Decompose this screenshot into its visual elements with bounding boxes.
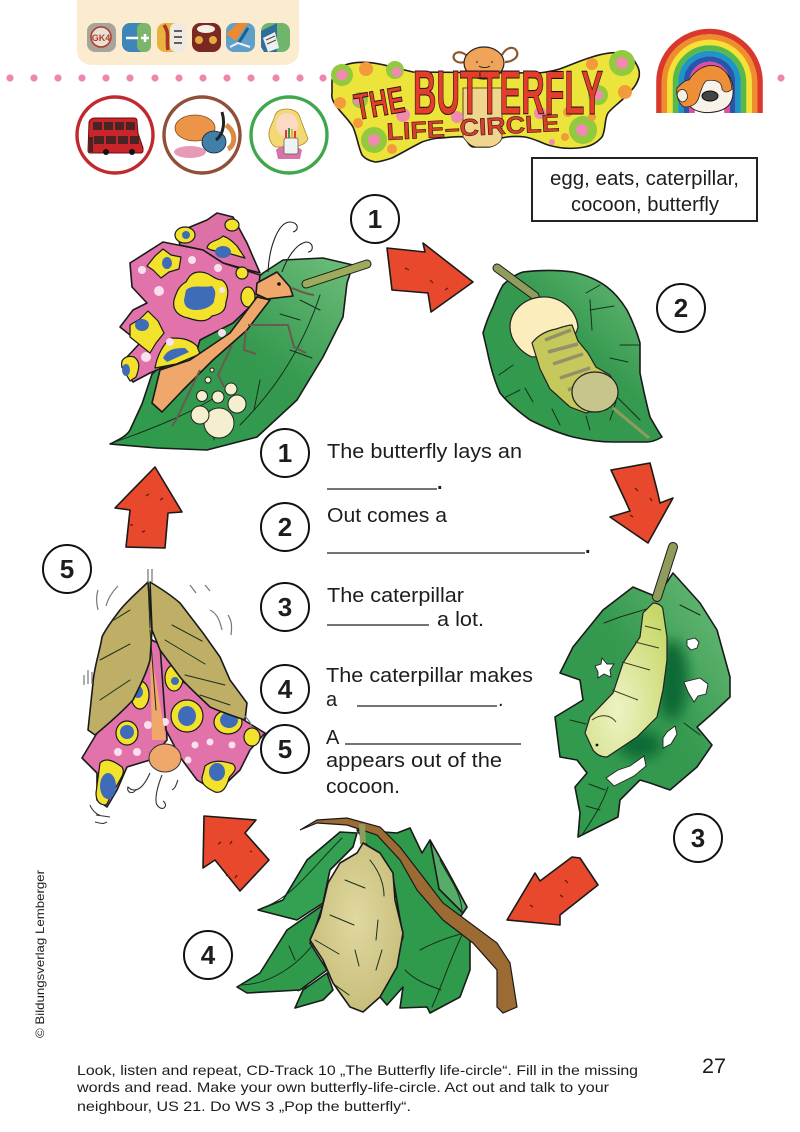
stage 2: caterpillar hatching on leaf [483, 268, 662, 442]
arrow: stage 3 to 4 [507, 857, 598, 925]
icon: speaking list [157, 23, 186, 52]
number badge 2: 2 [674, 293, 688, 323]
sentence 3: The caterpillar [327, 585, 464, 607]
number badge 4 [184, 931, 232, 979]
icon: GK4 badge: GK4 [92, 33, 110, 43]
page number: 27 [702, 1055, 726, 1078]
instructions footer: Look, listen and repeat, CD-Track 10 „The Butterfly life-circle“. Fill in the missing [77, 1063, 638, 1078]
number badge 5 [43, 545, 91, 593]
sentence 4 [261, 665, 533, 713]
sentence 1: . [437, 472, 443, 494]
sentence 1: The butterfly lays an [327, 441, 522, 463]
panel: activity icons header [77, 0, 299, 65]
icon: reading page [261, 23, 290, 52]
stage 5: butterfly emerging from cocoon [82, 569, 265, 824]
arrow: stage 4 to 5 [203, 816, 269, 891]
instructions footer: neighbour, US 21. Do WS 3 „Pop the butterfly“. [77, 1099, 411, 1114]
sentence 2: Out comes a [327, 505, 448, 527]
stage 1: butterfly laying eggs on leaf [110, 213, 367, 450]
icon: girl with pencils roundel [251, 97, 327, 173]
number badge 1: 1 [368, 204, 382, 234]
number badge 4: 4 [201, 940, 216, 970]
sentence 4: The caterpillar makes [326, 665, 533, 687]
sentence 3 [261, 583, 484, 631]
sentence 3: a lot. [437, 609, 484, 631]
word bank box: cocoon, butterfly [571, 194, 719, 216]
sentence 4: a [326, 689, 338, 711]
number badge 3 [674, 814, 722, 862]
number badge 5: 5 [60, 554, 74, 584]
sentence 5: appears out of the [326, 750, 502, 772]
icon: child reading roundel [164, 97, 240, 173]
sentence 5: A [326, 727, 340, 749]
instructions footer: words and read. Make your own butterfly-life-circle. Act out and talk to your [76, 1080, 610, 1095]
stage 3: caterpillar eating holes in leaf [555, 547, 730, 837]
word bank box: egg, eats, caterpillar, [550, 168, 739, 190]
number badge 1 [351, 195, 399, 243]
title: The Butterfly Life-Circle: BUTTERFLY [413, 59, 603, 128]
sentence 4: . [498, 689, 504, 711]
sentence 2: . [585, 536, 591, 558]
icon: writing pen [226, 23, 255, 52]
arrow: stage 2 to 3 [610, 463, 673, 543]
icon: group talk [192, 23, 221, 52]
dotted divider [6, 74, 785, 82]
title: The Butterfly Life-Circle: THE [351, 79, 408, 128]
sentence 4: 4 [278, 674, 293, 704]
icon: GK4 badge [87, 23, 116, 52]
number badge 2 [657, 284, 705, 332]
sentence 2 [261, 503, 591, 558]
sentence 1 [261, 429, 522, 494]
sentence 2: 2 [278, 512, 292, 542]
arrow: stage 5 to 1 [115, 467, 182, 548]
copyright note: © Bildungsverlag Lemberger [33, 870, 47, 1038]
title: The Butterfly Life-Circle [331, 47, 639, 162]
sentence 5: cocoon. [326, 776, 400, 798]
number badge 3: 3 [691, 823, 705, 853]
icon: arrow plus [122, 23, 151, 52]
title: The Butterfly Life-Circle: LIFE–CIRCLE [386, 110, 560, 146]
icon: red bus roundel [77, 97, 153, 173]
instructions footer [76, 1063, 638, 1114]
word bank box [532, 158, 757, 221]
stage 4: cocoon hanging from branch [237, 818, 517, 1013]
sentence 5 [261, 725, 521, 798]
sentence 1: 1 [278, 438, 292, 468]
icon: rainbow with dog [659, 32, 760, 113]
sentence 5: 5 [278, 734, 292, 764]
arrow: stage 1 to 2 [387, 243, 473, 312]
sentence 3: 3 [278, 592, 292, 622]
